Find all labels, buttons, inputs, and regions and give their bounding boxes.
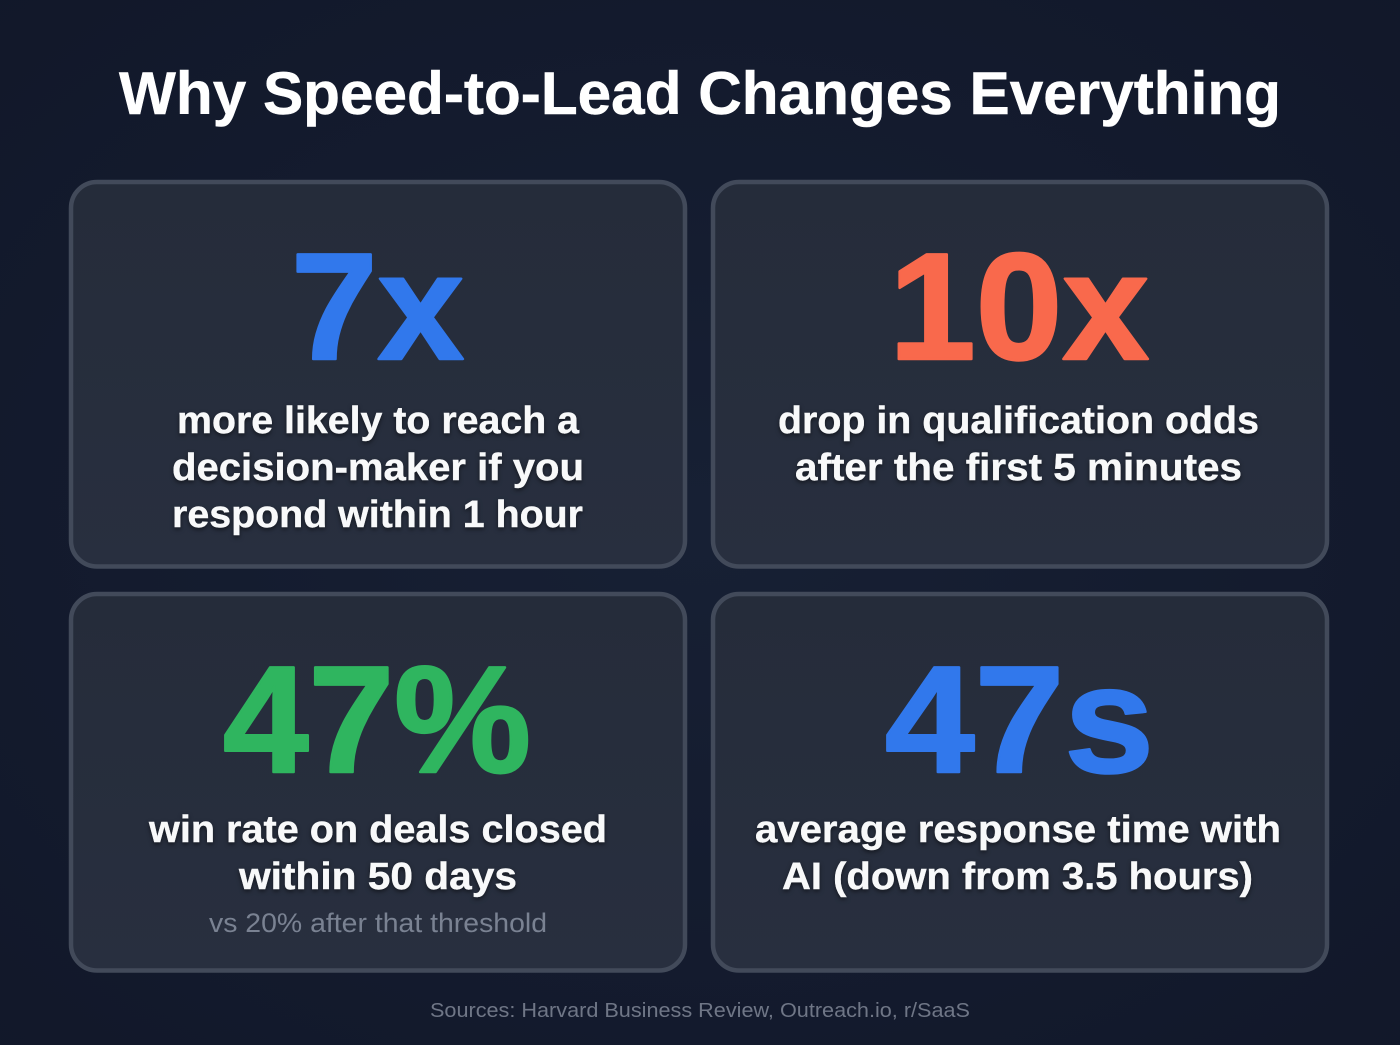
big number: 7x: 7x <box>291 222 464 392</box>
big number: 47%: 47% <box>223 635 531 805</box>
big number: 10x: 10x <box>889 222 1149 392</box>
panel: 47% stat <box>71 594 685 970</box>
description: AI (down from 3.5 hours) <box>782 856 1253 898</box>
panel: 47s stat <box>713 594 1327 970</box>
panel: 7x stat <box>71 182 685 566</box>
panel: 10x stat <box>713 182 1327 566</box>
description <box>778 400 1259 489</box>
description <box>755 809 1281 898</box>
comparison note: vs 20% after that threshold <box>209 908 547 938</box>
description: within 50 days <box>238 856 517 898</box>
title: Why Speed-to-Lead Changes Everything <box>119 60 1281 127</box>
card background <box>713 594 1327 970</box>
card background <box>71 594 685 970</box>
description <box>172 400 584 536</box>
description: decision-maker if you <box>172 447 584 489</box>
description: more likely to reach a <box>177 400 580 442</box>
description: respond within 1 hour <box>172 494 583 536</box>
card background <box>71 182 685 566</box>
big number: 47s: 47s <box>885 635 1154 805</box>
description: drop in qualification odds <box>778 400 1259 442</box>
description: average response time with <box>755 809 1281 851</box>
description <box>148 809 607 898</box>
description: after the first 5 minutes <box>795 447 1242 489</box>
description: win rate on deals closed <box>148 809 607 851</box>
sources footer: Sources: Harvard Business Review, Outreach.io, r/SaaS <box>430 1000 970 1022</box>
card background <box>713 182 1327 566</box>
